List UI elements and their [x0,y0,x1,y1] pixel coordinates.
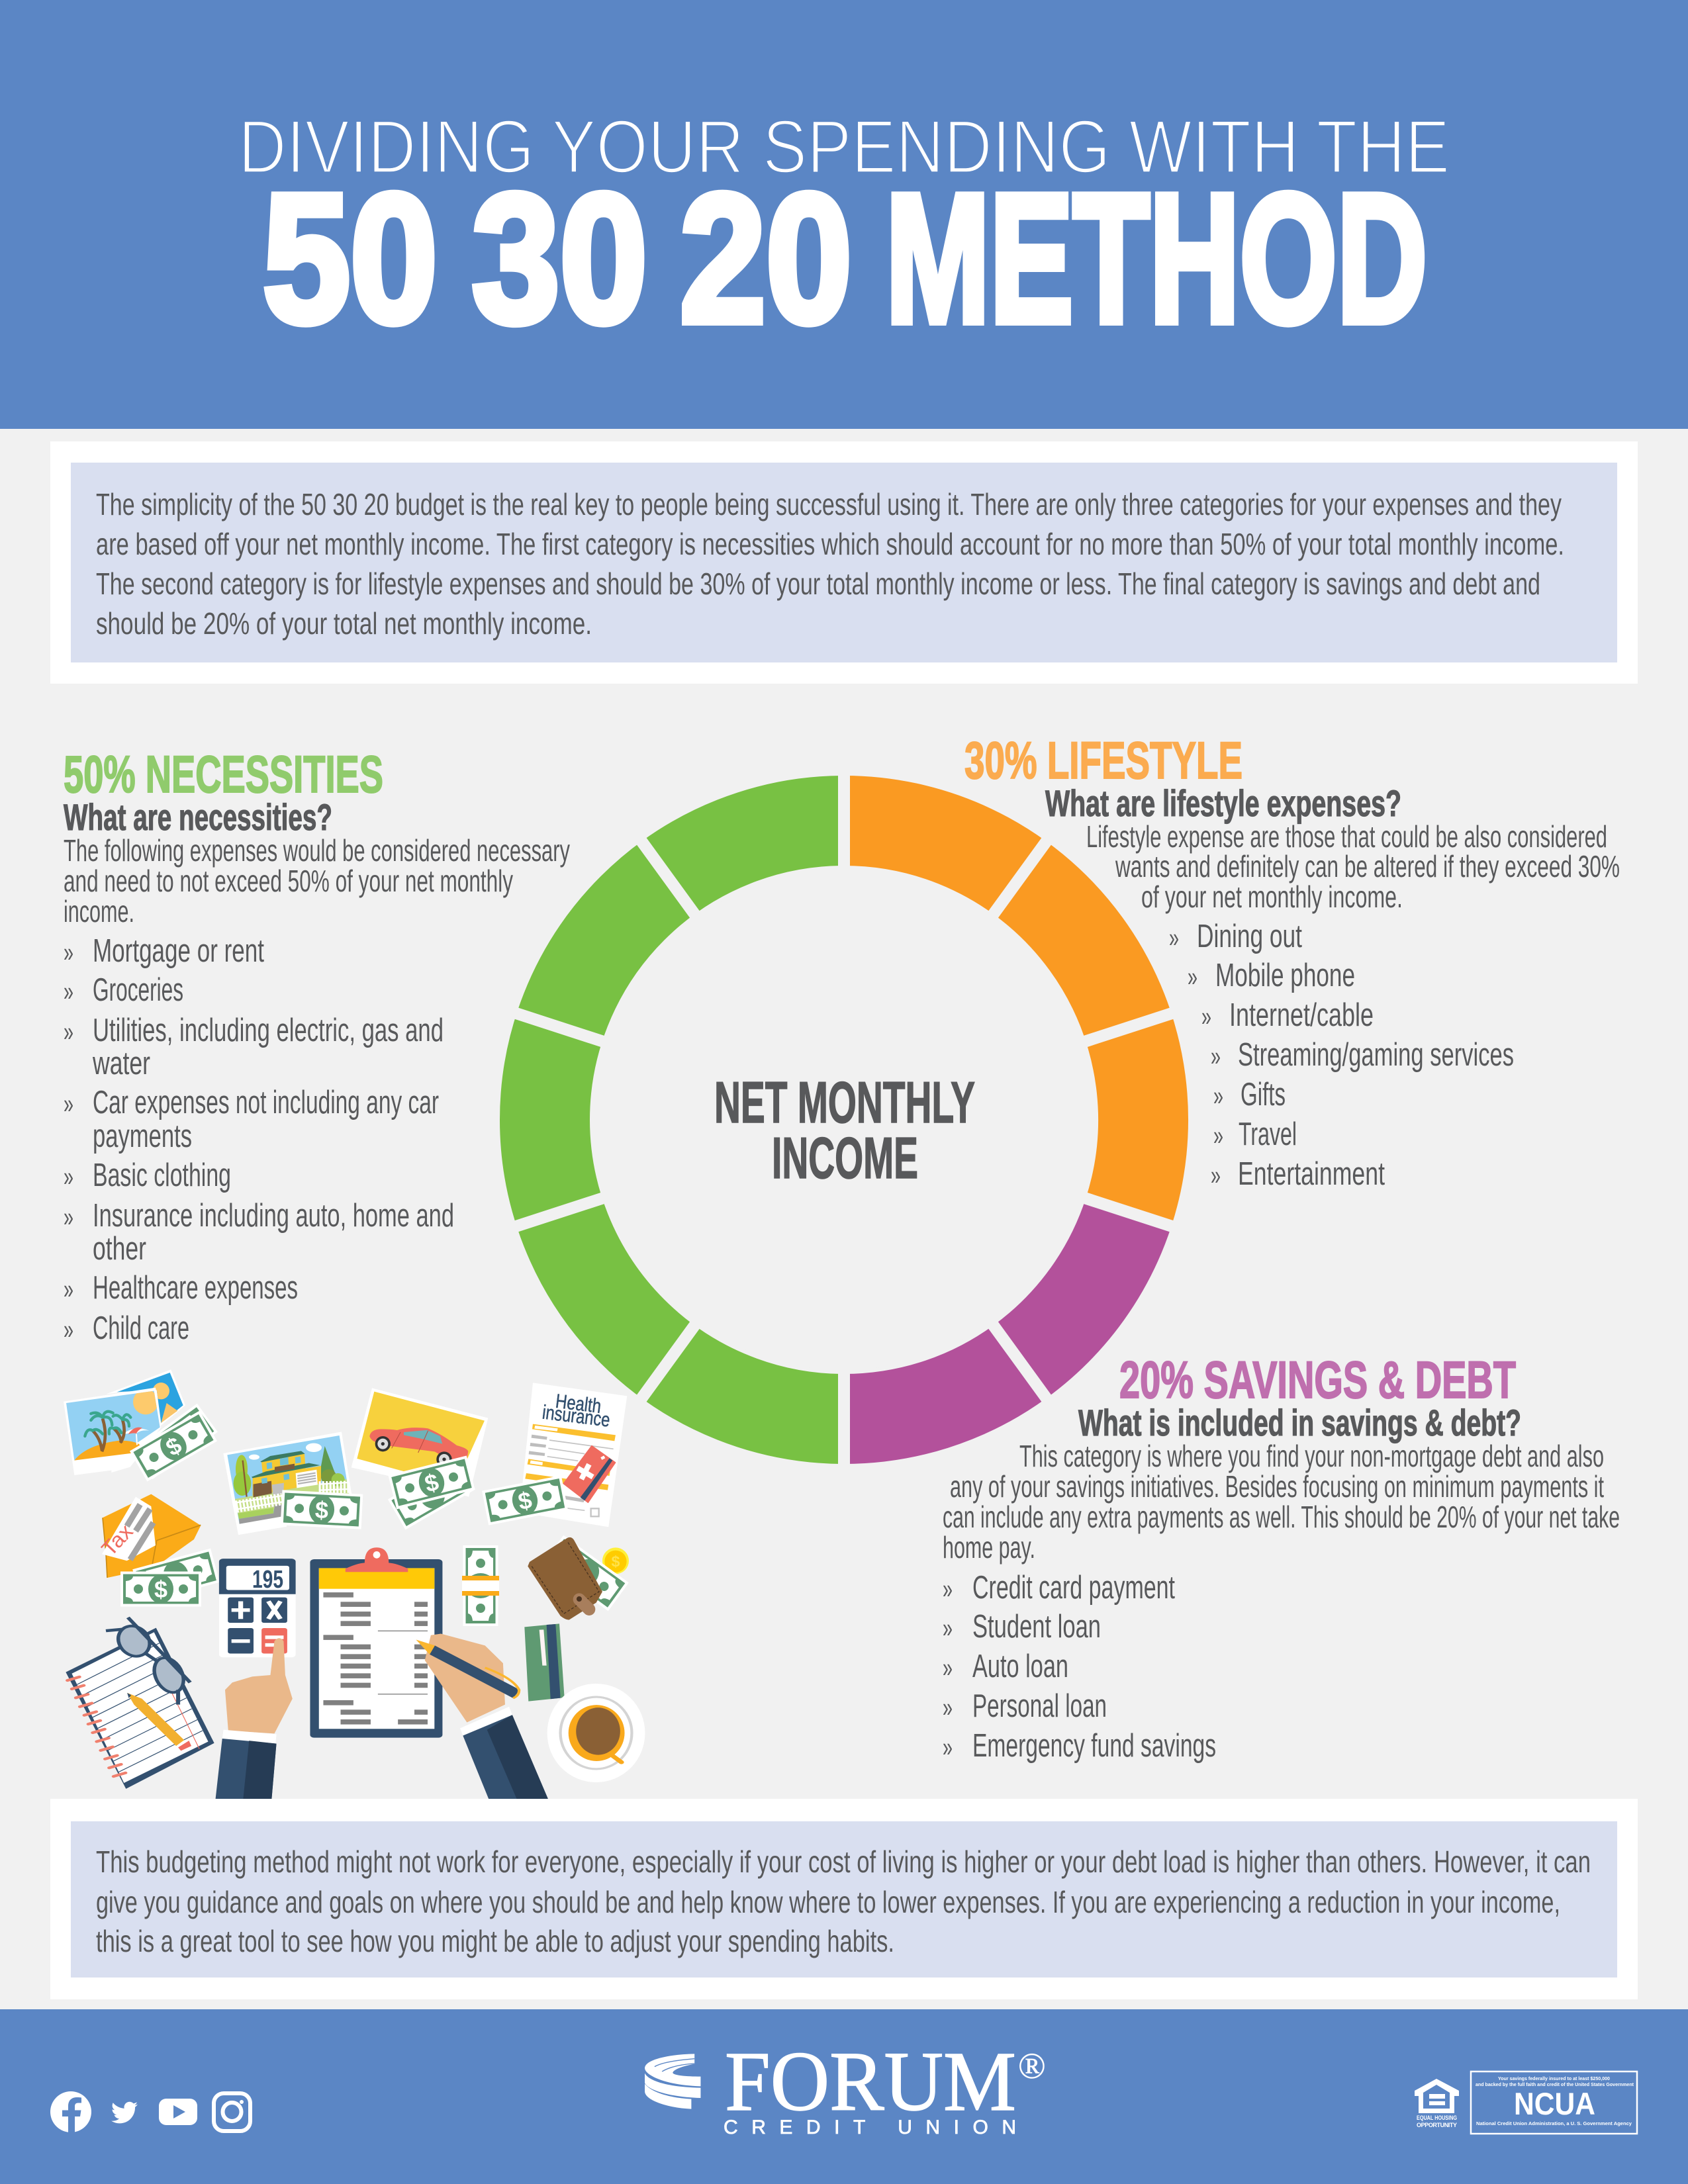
description: income. [64,894,134,929]
list: Child care [93,1310,189,1346]
list [943,1570,1216,1764]
list: payments [93,1118,192,1154]
title line 2 [263,156,1427,361]
list: Dining out [1197,919,1302,954]
description: home pay. [943,1530,1035,1565]
icon: right hand with pen [416,1634,548,1799]
list: » [64,1314,73,1345]
list: Travel [1239,1116,1297,1152]
icon: wallet: $ [611,1553,620,1570]
list: other [93,1231,146,1267]
list: » [1211,1160,1221,1191]
icon: beach photos [64,1369,185,1475]
registered mark: ® [1018,2046,1046,2086]
title line 1: DIVIDING YOUR SPENDING WITH THE [238,105,1450,189]
icon: left hand pressing calculator [215,1638,293,1799]
icon: coffee cup [547,1684,645,1782]
label: equal housing: EQUAL HOUSING [1417,2115,1457,2121]
list [1169,919,1514,1192]
list: Healthcare expenses [93,1270,298,1306]
icon: facebook [50,2091,91,2132]
icon: insurance card [564,1446,615,1502]
intro text [96,487,1564,641]
list: » [64,1088,73,1119]
list: » [1213,1080,1223,1111]
segment group: savings and debt 20% [844,1212,1129,1419]
logo swoosh [645,2054,700,2109]
icon: notebook [66,1617,214,1789]
list: Auto loan [972,1649,1068,1684]
list: » [1201,1001,1211,1032]
panel: intro [50,441,1638,684]
list: » [64,1273,73,1304]
list: » [1213,1120,1223,1151]
badge: NCUA: National Credit Union Administration, a U. S. Government Agency [1476,2120,1632,2126]
list: Groceries [93,972,183,1008]
segment group: necessities 50% [545,821,844,1419]
icon: equal housing opportunity [1415,2079,1459,2128]
panel: 50% necessities [64,745,570,1346]
list [64,933,454,1346]
icon: clipboard [310,1547,442,1738]
list: » [64,936,73,968]
title line 2: 50 [263,156,438,361]
icon: dollar bill behind [132,1549,220,1603]
icon: dollar bill [482,1475,568,1525]
icon: dollar bill [130,1411,217,1481]
description: and need to not exceed 50% of your net monthly [64,864,513,898]
icon: dollar bill: $ [516,1486,534,1516]
icon: wallet [528,1535,629,1619]
footer band [0,2009,1688,2184]
list: » [1188,961,1197,992]
heading: 50% NECESSITIES [64,745,383,803]
icon: dollar bill: $ [314,1496,329,1524]
icon: car photo [352,1388,488,1497]
list: » [943,1612,953,1643]
heading: 30% LIFESTYLE [964,731,1243,790]
badge: NCUA [1471,2071,1637,2134]
icon: dollar bill: $ [422,1468,442,1498]
subheading: What are lifestyle expenses? [1045,782,1401,824]
list: Basic clothing [93,1158,231,1193]
label: tax: Tax [97,1520,138,1561]
list: Entertainment [1238,1156,1385,1192]
list: » [64,1201,73,1232]
icon: dollar bill: $ [161,1432,186,1461]
description [1086,819,1620,914]
label: health: Health [554,1390,602,1418]
icon: tax envelope [97,1494,201,1578]
description [64,833,570,929]
icon: dollar bill behind [388,1459,475,1529]
list: Personal loan [972,1688,1107,1724]
panel: 20% savings and debt [943,1350,1620,1764]
logo: forum credit union [645,2034,1046,2138]
list: Insurance including auto, home and [93,1198,454,1234]
list: » [64,976,73,1007]
list: Streaming/gaming services [1238,1037,1514,1073]
list: Credit card payment [972,1570,1175,1606]
panel: closing note [50,1799,1638,1999]
list: water [92,1046,150,1081]
badge: NCUA: Your savings federally insured to at least $250,000 [1498,2075,1610,2081]
title line 2: METHOD [886,156,1427,361]
illustration: budgeting desk [64,1369,645,1799]
label: opportunity: OPPORTUNITY [1417,2122,1457,2128]
badge: NCUA: NCUA [1514,2086,1595,2121]
label: insurance: insurance [541,1402,611,1432]
list: Student loan [972,1609,1101,1645]
description [943,1439,1620,1565]
list: » [943,1652,953,1683]
list: Emergency fund savings [972,1728,1216,1764]
logo wordmark: FORUM [725,2034,1016,2128]
title line 2: 30 [472,156,647,361]
icon: calculator [219,1559,296,1657]
icon: dollar bill [388,1456,475,1509]
title line 2: 20 [680,156,852,361]
heading: 20% SAVINGS & DEBT [1119,1350,1516,1409]
center label: INCOME [772,1125,918,1191]
icon: dollar bill: $ [154,1576,167,1603]
donut chart: net monthly income [503,761,1185,1479]
list: Internet/cable [1229,997,1374,1033]
list: Gifts [1241,1077,1286,1113]
closing text: this is a great tool to see how you might be able to adjust your spending habits. [96,1924,894,1958]
list: Mortgage or rent [93,933,264,969]
center label: NET MONTHLY [714,1069,975,1135]
icon: twitter [111,2102,138,2123]
icon: banded dollar bill [462,1545,499,1626]
icon: dollar bill behind [132,1404,218,1479]
intro text: should be 20% of your total net monthly income. [96,606,592,641]
list: » [943,1573,953,1604]
list: » [64,1161,73,1192]
description: of your net monthly income. [1141,880,1403,914]
list: » [64,1016,73,1047]
icon: credit card [524,1623,565,1702]
segment group: lifestyle 30% [844,821,1143,1212]
label: calculator display: 195 [252,1566,283,1594]
panel: 30% lifestyle [964,731,1620,1192]
description: The following expenses would be considered necessary [64,833,570,868]
icon: dollar bill [120,1571,201,1607]
list: » [943,1692,953,1723]
badge: NCUA: and backed by the full faith and credit of the United States Government [1476,2081,1634,2087]
list: Mobile phone [1215,958,1355,993]
closing text [96,1844,1591,1958]
center label [714,1069,975,1191]
logo tagline: CREDIT UNION [724,2116,1016,2138]
icon: dollar bill [281,1490,363,1529]
list: Utilities, including electric, gas and [93,1013,444,1048]
list: » [943,1731,953,1762]
header banner [0,0,1688,429]
subheading: What are necessities? [64,796,332,838]
list: » [1211,1040,1221,1071]
icon: house photo [223,1432,352,1535]
icon: youtube [159,2099,197,2125]
icon: instagram [214,2093,250,2131]
list: » [1169,922,1179,953]
list: Car expenses not including any car [93,1085,439,1120]
icon: health insurance form [520,1383,627,1527]
